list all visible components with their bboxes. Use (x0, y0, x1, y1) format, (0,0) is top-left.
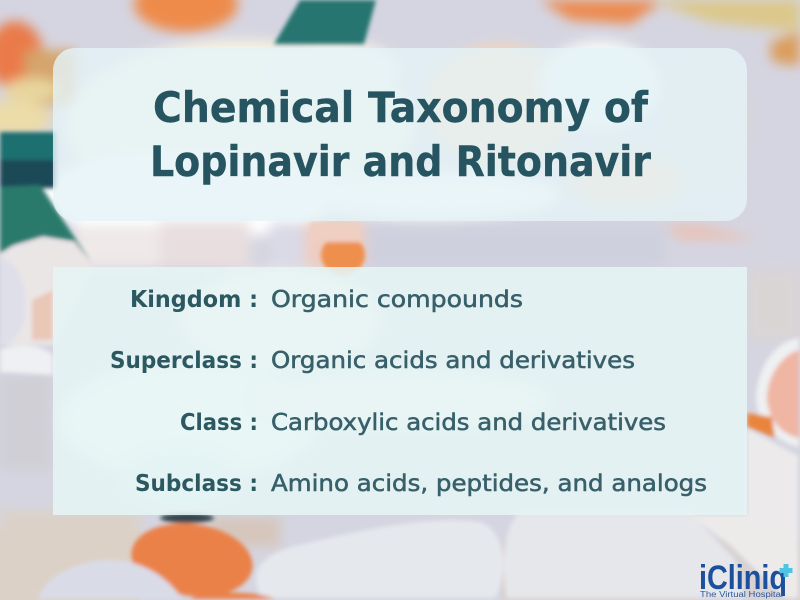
row: subclass: Subclass : (135, 471, 258, 497)
row: superclass: Organic acids and derivatives (271, 348, 635, 374)
title: Chemical Taxonomy of (153, 83, 649, 132)
logo: iCliniq: The Virtual Hospital (700, 590, 783, 599)
title: Lopinavir and Ritonavir (150, 137, 651, 186)
row: superclass (110, 348, 635, 374)
panel: taxonomy list (53, 267, 747, 515)
row: superclass: Superclass : (110, 348, 258, 374)
panel: title (53, 48, 747, 221)
row: kingdom: Organic compounds (271, 287, 523, 313)
row: class: Class : (180, 410, 258, 436)
row: kingdom (130, 287, 523, 313)
row: subclass: Amino acids, peptides, and analogs (271, 471, 707, 497)
row: kingdom: Kingdom : (130, 287, 258, 313)
title (150, 83, 651, 186)
logo: iCliniq: iCliniq (699, 559, 787, 597)
icon: plus (780, 564, 792, 577)
row: class: Carboxylic acids and derivatives (271, 410, 666, 436)
